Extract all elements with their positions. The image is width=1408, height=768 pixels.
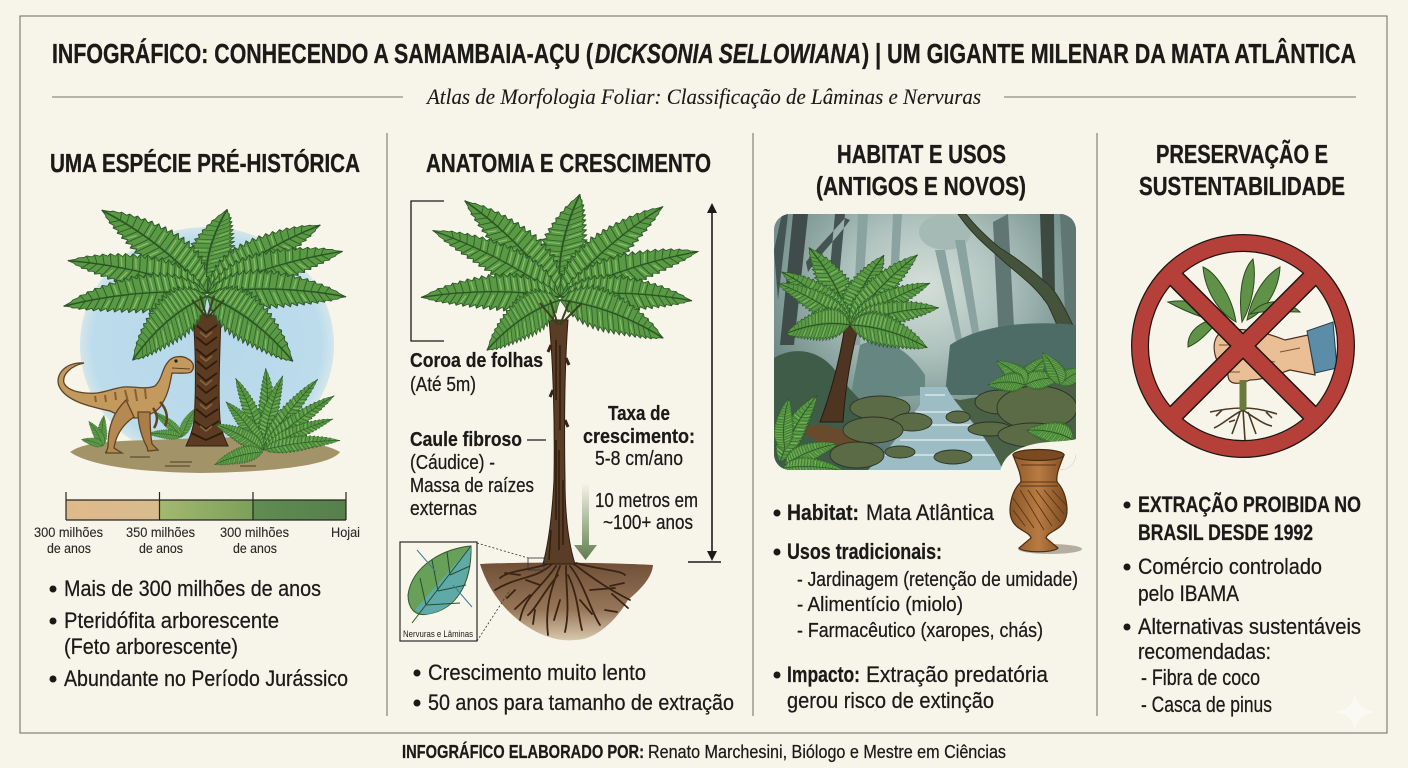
icon: small ferns behind bbox=[81, 405, 197, 451]
stem and roots bbox=[1210, 408, 1277, 440]
footer credit: INFOGRÁFICO ELABORADO POR: bbox=[402, 741, 644, 762]
label: caule fibroso: (Cáudice) - bbox=[410, 452, 495, 474]
arrow: total height bbox=[688, 203, 721, 562]
label: caule fibroso bbox=[410, 429, 546, 520]
panel: anatomia e crescimento bbox=[400, 148, 734, 715]
prohibition ring and cross bbox=[1140, 243, 1346, 449]
text: extração proibida: EXTRAÇÃO PROIBIDA NO bbox=[1138, 492, 1361, 517]
label: taxa de crescimento: ~100+ anos bbox=[603, 512, 693, 534]
bullet list: espécie: Pteridófita arborescente bbox=[64, 608, 279, 633]
subtitle: Atlas de Morfologia Foliar: Classificação de Lâminas e Nervuras bbox=[425, 84, 981, 109]
inset: nervuras e lâminas bbox=[400, 542, 544, 641]
text: comércio controlado bbox=[1124, 554, 1322, 606]
text: usos tradicionais bbox=[774, 539, 1078, 642]
timeline bbox=[34, 492, 360, 556]
text: extração proibida: BRASIL DESDE 1992 bbox=[1138, 520, 1313, 545]
timeline: 300 milhões bbox=[34, 524, 103, 540]
label: taxa de crescimento: Taxa de bbox=[608, 403, 670, 425]
text: habitat: Mata Atlântica bbox=[866, 500, 995, 525]
label: coroa de folhas bbox=[410, 350, 543, 396]
bullet list: espécie bbox=[50, 576, 348, 691]
inset: nervuras e lâminas: Nervuras e Lâminas bbox=[403, 629, 473, 639]
panel: uma espécie pré-histórica bbox=[34, 148, 360, 691]
illustration: prehistoric fern and dinosaur bbox=[58, 179, 346, 473]
timeline: de anos bbox=[47, 540, 91, 556]
bullet list: anatomia bbox=[414, 660, 734, 715]
title bbox=[52, 38, 1356, 69]
heading: habitat e usos: (ANTIGOS E NOVOS) bbox=[816, 171, 1026, 201]
heading: preservação e sustentabilidade: PRESERVAÇÃO E bbox=[1156, 139, 1328, 169]
text: alternativas sustentáveis: Alternativas sustentáveis bbox=[1138, 614, 1361, 639]
prehistoric tree trunk bbox=[186, 315, 228, 446]
heading: habitat e usos: HABITAT E USOS bbox=[837, 139, 1006, 169]
heading: habitat e usos bbox=[816, 139, 1026, 201]
label: caule fibroso: Massa de raízes bbox=[410, 475, 534, 497]
timeline: de anos bbox=[139, 540, 183, 556]
timeline: 350 milhões bbox=[126, 524, 195, 540]
illustration: atlantic forest scene bbox=[774, 214, 1076, 470]
text: comércio controlado: pelo IBAMA bbox=[1138, 581, 1239, 606]
timeline: Hojai bbox=[331, 524, 360, 540]
label: taxa de crescimento bbox=[583, 403, 698, 534]
prehistoric tree crown bbox=[64, 179, 346, 364]
text: usos tradicionais: Usos tradicionais: bbox=[787, 539, 942, 564]
heading: preservação e sustentabilidade bbox=[1139, 139, 1345, 201]
icon: dinosaur bbox=[58, 357, 193, 453]
footer credit bbox=[402, 741, 1006, 762]
bracket: coroa de folhas bbox=[411, 201, 444, 341]
text: comércio controlado: Comércio controlado bbox=[1138, 554, 1322, 579]
title: INFOGRÁFICO: CONHECENDO A SAMAMBAIA-AÇU ( bbox=[52, 38, 594, 69]
bullet list: anatomia: 50 anos para tamanho de extração bbox=[428, 690, 734, 715]
label: coroa de folhas: (Até 5m) bbox=[410, 374, 476, 396]
text: habitat: Habitat: bbox=[787, 500, 859, 525]
icon: prohibited extraction sign bbox=[1140, 243, 1346, 449]
text: usos tradicionais: - Alimentício (miolo) bbox=[797, 594, 963, 616]
heading: anatomia e crescimento: ANATOMIA E CRESCIMENTO bbox=[426, 148, 711, 178]
footer credit: Renato Marchesini, Biólogo e Mestre em Ciências bbox=[648, 742, 1006, 762]
bullet list: espécie: (Feto arborescente) bbox=[64, 634, 238, 659]
bullet list: espécie: Mais de 300 milhões de anos bbox=[64, 576, 321, 601]
icon: woven vase bbox=[1010, 450, 1082, 554]
text: impacto: gerou risco de extinção bbox=[787, 688, 994, 713]
text: usos tradicionais: - Jardinagem (retenção de umidade) bbox=[797, 569, 1078, 591]
text: impacto: Impacto: bbox=[787, 662, 860, 687]
heading: preservação e sustentabilidade: SUSTENTABILIDADE bbox=[1139, 171, 1345, 201]
title: DICKSONIA SELLOWIANA bbox=[595, 38, 861, 69]
panel: preservação e sustentabilidade bbox=[1124, 139, 1361, 717]
icon: soil and roots bbox=[480, 563, 653, 640]
text: alternativas sustentáveis: - Casca de pinus bbox=[1141, 692, 1272, 717]
text: impacto bbox=[774, 662, 1049, 713]
heading: uma espécie pré-histórica: UMA ESPÉCIE PRÉ-HISTÓRICA bbox=[50, 148, 360, 178]
label: caule fibroso: externas bbox=[410, 498, 477, 520]
bullet list: anatomia: Crescimento muito lento bbox=[428, 660, 646, 685]
icon: fern bush bbox=[214, 368, 340, 466]
bullet list: espécie: Abundante no Período Jurássico bbox=[64, 666, 348, 691]
icon: sparkle bbox=[1335, 692, 1375, 732]
label: taxa de crescimento: 10 metros em bbox=[595, 490, 698, 512]
panel: habitat e usos bbox=[767, 139, 1089, 713]
text: usos tradicionais: - Farmacêutico (xaropes, chás) bbox=[797, 620, 1043, 642]
label: coroa de folhas: Coroa de folhas bbox=[410, 350, 543, 372]
timeline: 300 milhões bbox=[220, 524, 289, 540]
text: impacto: Extração predatória bbox=[866, 662, 1049, 687]
anatomy tree trunk bbox=[543, 320, 575, 564]
text: extração proibida bbox=[1124, 492, 1361, 545]
text: alternativas sustentáveis bbox=[1124, 614, 1361, 717]
arrow: growth direction bbox=[574, 483, 597, 560]
label: caule fibroso: Caule fibroso bbox=[410, 429, 522, 451]
plant being pulled bbox=[1168, 259, 1300, 347]
timeline: de anos bbox=[233, 540, 277, 556]
text: alternativas sustentáveis: - Fibra de coco bbox=[1141, 665, 1260, 690]
hand and cuff bbox=[1214, 330, 1315, 383]
text: alternativas sustentáveis: recomendadas: bbox=[1138, 639, 1271, 664]
text: habitat bbox=[774, 500, 995, 525]
label: taxa de crescimento: crescimento: bbox=[583, 426, 695, 448]
anatomy tree crown bbox=[421, 176, 699, 353]
label: taxa de crescimento: 5-8 cm/ano bbox=[595, 448, 683, 470]
